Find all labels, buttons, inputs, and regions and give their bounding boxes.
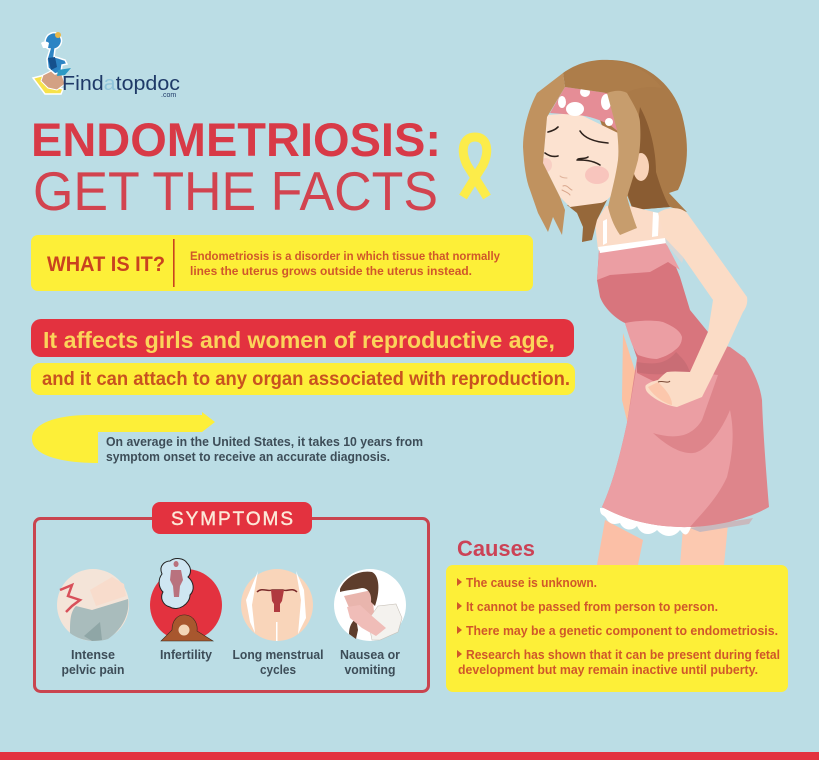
grey lace bbox=[690, 518, 753, 532]
logo wordmark: Findatopdoc bbox=[62, 73, 180, 95]
panel: what is it bbox=[31, 235, 533, 291]
facial features bbox=[545, 127, 608, 195]
bullet 4: development but may remain inactive until puberty. bbox=[458, 663, 758, 677]
skirt light panel bbox=[602, 365, 733, 527]
text: diagnosis statistic: On average in the United States, it takes 10 years from bbox=[106, 435, 423, 449]
bullet 2: It cannot be passed from person to person. bbox=[466, 600, 718, 614]
panel: causes bbox=[446, 565, 788, 692]
text: diagnosis statistic bbox=[106, 435, 423, 464]
title bbox=[31, 113, 441, 222]
symptoms heading bbox=[152, 502, 312, 534]
text: diagnosis statistic: symptom onset to receive an accurate diagnosis. bbox=[106, 450, 390, 464]
icon: pelvic pain bbox=[57, 569, 129, 641]
back hair shadow bbox=[628, 107, 670, 210]
face bbox=[543, 113, 620, 207]
label: Nausea or bbox=[340, 647, 400, 662]
what is it text: lines the uterus grows outside the uterus instead. bbox=[190, 264, 472, 278]
symptoms heading: SYMPTOMS bbox=[171, 509, 293, 530]
blush bbox=[585, 166, 609, 184]
label: Long menstrual bbox=[232, 647, 324, 662]
legs bbox=[597, 520, 728, 565]
blush left bbox=[540, 158, 552, 172]
banner: yellow: and it can attach to any organ associated with reproduction. bbox=[42, 369, 570, 390]
banner: red: It affects girls and women of reproductive age, bbox=[43, 327, 555, 353]
left hair curtain bbox=[523, 73, 565, 235]
lace hem bbox=[600, 508, 691, 536]
banner: yellow bbox=[31, 363, 575, 395]
logo suffix: .com bbox=[161, 92, 176, 99]
arrow: yellow U-turn bbox=[32, 412, 215, 463]
front lock bbox=[607, 91, 640, 235]
bodice upper highlight bbox=[597, 243, 680, 280]
bullet 3: There may be a genetic component to endometriosis. bbox=[466, 624, 778, 638]
neck and chest bbox=[595, 206, 668, 250]
label: Infertility bbox=[160, 647, 213, 662]
footer bar bbox=[0, 752, 819, 760]
neck hair bbox=[567, 200, 607, 242]
bullet 4 bbox=[457, 648, 780, 677]
back hair bbox=[600, 60, 687, 212]
dress straps bbox=[598, 212, 667, 253]
icon: infertility bbox=[150, 559, 222, 641]
icon: yellow awareness ribbon bbox=[463, 137, 487, 197]
near arm and hand bbox=[645, 208, 747, 407]
far arm bbox=[622, 333, 637, 425]
icon: duck mascot bbox=[33, 32, 71, 94]
label: cycles bbox=[260, 662, 296, 677]
label: pelvic pain bbox=[62, 662, 125, 677]
what is it heading: WHAT IS IT? bbox=[47, 253, 165, 276]
label: vomiting bbox=[344, 662, 396, 677]
finger line bbox=[658, 381, 670, 382]
label: Intense bbox=[71, 647, 115, 662]
bullet 4: Research has shown that it can be present during fetal bbox=[466, 648, 780, 662]
icon: nausea bbox=[334, 569, 406, 641]
dress bodice bbox=[597, 245, 708, 382]
causes heading: Causes bbox=[457, 536, 535, 561]
illustration: woman in pink dress bbox=[523, 60, 769, 565]
panel: symptoms bbox=[34, 502, 428, 692]
what is it text: Endometriosis is a disorder in which tissue that normally bbox=[190, 249, 500, 263]
what is it text bbox=[190, 249, 500, 278]
dress waist fold bbox=[637, 352, 690, 374]
grey strip bbox=[665, 238, 684, 263]
banner: red bbox=[31, 319, 574, 357]
hand shadow bbox=[648, 382, 672, 405]
title line 2: GET THE FACTS bbox=[33, 160, 438, 222]
icon: uterus bbox=[241, 569, 313, 641]
logo: Findatopdoc bbox=[33, 32, 180, 99]
headband bbox=[550, 87, 620, 133]
ear bbox=[633, 153, 649, 181]
bodice highlight bbox=[625, 321, 682, 359]
bullet 1: The cause is unknown. bbox=[466, 576, 597, 590]
skirt bbox=[602, 340, 769, 527]
title line 1: ENDOMETRIOSIS: bbox=[31, 113, 441, 166]
hair crown bbox=[563, 60, 662, 93]
